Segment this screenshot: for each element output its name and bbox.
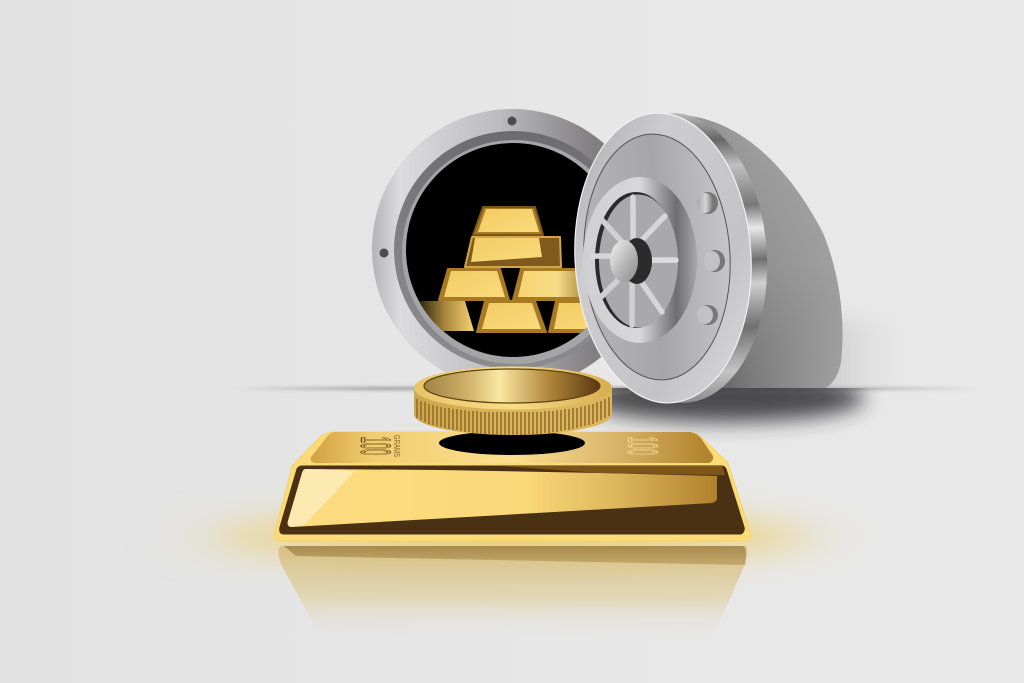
door side edge — [582, 109, 774, 407]
vault frame — [372, 109, 652, 389]
wheel ring — [583, 177, 697, 343]
vault rivet top — [508, 116, 516, 126]
door face — [568, 109, 758, 407]
door shadow on floor — [585, 374, 865, 422]
door bolt top — [697, 192, 718, 214]
bar row 4 left — [419, 301, 474, 331]
wheel hub — [610, 238, 652, 284]
bar row 1 — [473, 207, 543, 235]
bar top face — [311, 432, 713, 463]
bar row 3 right — [513, 269, 590, 300]
door bolt middle — [704, 250, 725, 272]
gold bars stack — [410, 207, 600, 332]
door shadow on wall — [691, 116, 872, 388]
front dark upper wedge — [500, 466, 725, 475]
bar row 3 left — [439, 269, 509, 300]
coin edge — [414, 388, 612, 435]
stamp right: 100 — [619, 437, 667, 455]
door inner panel — [578, 130, 736, 384]
wheel spokes — [592, 197, 676, 325]
glow under gold bar — [140, 497, 884, 577]
coin inner — [424, 369, 600, 403]
stamp small text: GRAMS — [392, 435, 402, 457]
vault rivet left — [380, 248, 388, 258]
door bolt bottom — [697, 305, 718, 325]
floor line shadow — [230, 387, 980, 390]
bar row 2 — [465, 237, 561, 267]
gold coin — [414, 366, 612, 435]
coin rim — [414, 366, 612, 410]
bar front panel — [280, 466, 744, 534]
vault door — [568, 109, 774, 407]
illustration: gold vault scene — [179, 109, 950, 624]
gold bar — [274, 432, 750, 541]
reflection of gold bar — [278, 546, 747, 640]
wheel opening — [595, 192, 678, 328]
bar body — [274, 432, 750, 541]
front highlight — [288, 469, 355, 527]
stamp left: 100 — [352, 437, 400, 455]
coin reeding — [417, 397, 609, 435]
vault interior — [406, 143, 620, 357]
coin shadow on bar — [439, 431, 585, 455]
front gold shine — [288, 469, 717, 527]
bar row 4 middle — [477, 301, 546, 332]
bar row 4 right — [548, 301, 588, 333]
